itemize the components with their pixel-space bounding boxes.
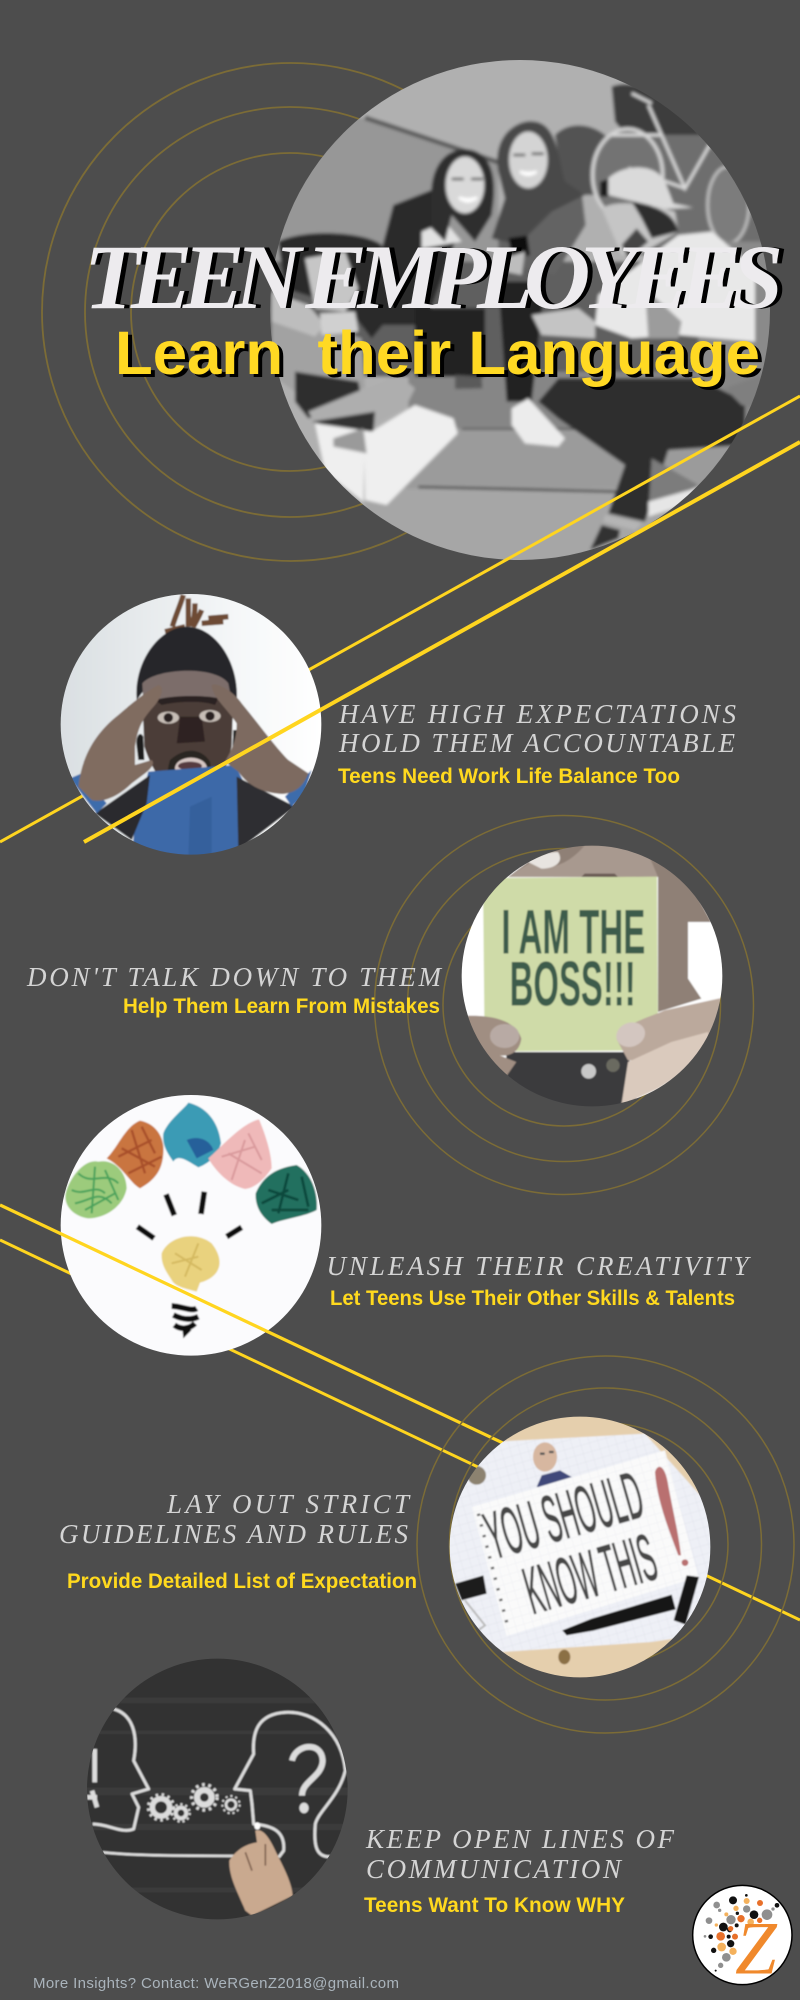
- text: talk down: Help Them Learn From Mistakes: [123, 995, 440, 1018]
- photo: surprised man: [55, 590, 325, 860]
- text: creativity: Let Teens Use Their Other Skills & Talents: [330, 1287, 735, 1310]
- photo: I am the boss note: [458, 842, 728, 1112]
- subtitle: Learn their Language: [119, 322, 764, 390]
- line B: [84, 442, 800, 842]
- text: open lines: Teens Want To Know WHY: [364, 1894, 625, 1917]
- logo: Z: [735, 1908, 778, 1991]
- photo: you should know this: [445, 1412, 715, 1682]
- text: guidelines: LAY OUT STRICT: [166, 1489, 411, 1519]
- text: creativity: [326, 1251, 751, 1310]
- text: high expectations: Teens Need Work Life Balance Too: [338, 765, 680, 788]
- line A: [0, 396, 800, 842]
- photo: crumpled paper light bulb: [55, 1090, 325, 1360]
- text: talk down: [26, 962, 443, 1018]
- logo: [693, 1885, 792, 1991]
- boss rings: [374, 816, 754, 1194]
- text: high expectations: HAVE HIGH EXPECTATIONS: [338, 699, 736, 729]
- line C: [0, 1205, 560, 1470]
- photo: I am the boss note: BOSS!!!: [510, 949, 636, 1019]
- man: [595, 232, 755, 342]
- text: open lines: COMMUNICATION: [366, 1854, 623, 1884]
- title: TEEN EMPLOYEES: [89, 226, 788, 328]
- middle woman: [496, 195, 587, 264]
- guideline rings: [417, 1356, 794, 1733]
- text: open lines: KEEP OPEN LINES OF: [365, 1824, 674, 1854]
- text: guidelines: Provide Detailed List of Expectation: [67, 1570, 417, 1593]
- text: high expectations: HOLD THEM ACCOUNTABLE: [338, 728, 736, 758]
- text: talk down: DON'T TALK DOWN TO THEM: [26, 962, 443, 992]
- middle-left woman: [378, 190, 455, 325]
- hero photo: teens on steps: [265, 55, 785, 575]
- text: guidelines: GUIDELINES AND RULES: [59, 1519, 408, 1549]
- hero concentric rings: [42, 63, 540, 561]
- text: open lines: [364, 1824, 674, 1917]
- left woman: [272, 322, 365, 392]
- text: high expectations: [338, 699, 736, 788]
- title: TEEN EMPLOYEES: [84, 226, 783, 328]
- text: guidelines: [59, 1489, 417, 1593]
- subtitle: Learn their Language: [115, 319, 760, 387]
- photo: chalkboard heads: [82, 1654, 352, 1924]
- text: creativity: UNLEASH THEIR CREATIVITY: [326, 1251, 751, 1281]
- photo: I am the boss note: I AM THE: [501, 898, 645, 968]
- line D: [0, 1240, 800, 1620]
- footer contact: More Insights? Contact: WeRGenZ2018@gmail.com: [33, 1975, 399, 1992]
